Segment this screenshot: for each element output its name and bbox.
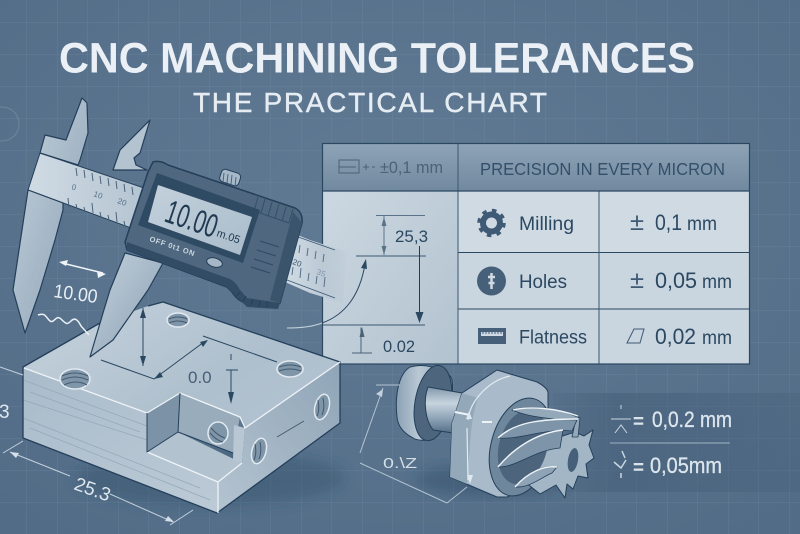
caliper beam: 20 <box>116 196 128 208</box>
table header: ±0,1 mm <box>380 158 443 177</box>
lcd screen <box>148 185 252 255</box>
block faces <box>23 302 340 513</box>
dimension drawing cell <box>322 191 458 364</box>
row: milling: ± <box>630 209 644 236</box>
upper sliding jaw <box>113 120 150 170</box>
block length dimension: 25.3 <box>71 474 113 506</box>
lower sliding jaw <box>90 253 163 357</box>
row: holes: Holes <box>519 272 567 293</box>
table header <box>322 144 750 191</box>
icon: ruler <box>478 328 506 344</box>
row: milling <box>479 209 717 236</box>
icon: flatness symbol <box>627 329 644 343</box>
digital display body: 10.00 <box>161 193 223 245</box>
row: holes: mm <box>702 272 732 293</box>
hole tolerance: = <box>633 457 644 479</box>
caliper beam: 10 <box>92 189 104 201</box>
threaded holes <box>60 313 332 465</box>
curved leader arrow <box>287 259 367 328</box>
row: holes <box>477 266 732 296</box>
thumb wheel <box>219 168 242 187</box>
caliper beam: 20 <box>291 257 303 269</box>
spiral flutes <box>512 407 580 437</box>
icon: gear <box>479 210 504 236</box>
block length dimension <box>0 367 193 525</box>
row: holes: 0,05 <box>655 268 697 293</box>
on button <box>206 256 223 269</box>
caliper beam: 35 <box>315 267 327 279</box>
table rules <box>322 143 750 364</box>
block dimensions: 0.0 <box>188 368 212 387</box>
row: holes: ± <box>630 267 644 294</box>
caliper beam: 0 <box>70 182 78 193</box>
row: flatness <box>478 324 732 349</box>
digital display body <box>125 161 302 309</box>
cutter dimension: 0.\Z <box>383 455 417 472</box>
row cells <box>458 191 750 364</box>
shank <box>425 387 462 433</box>
dimension drawing cell: 0.02 <box>383 337 415 356</box>
cutter body <box>450 370 548 497</box>
subtitle: THE PRACTICAL CHART <box>193 87 547 118</box>
note panel: secondary tolerances <box>553 393 800 492</box>
flatness tolerance <box>611 405 732 433</box>
cutter tool <box>396 362 594 503</box>
flatness tolerance: 0,0.2 mm <box>652 407 732 432</box>
measured gap callout <box>38 260 106 335</box>
row: flatness: Flatness <box>519 328 587 348</box>
row: milling: Milling <box>519 214 574 235</box>
block dimensions <box>101 308 304 437</box>
digital display body: OFF 0t1 ON <box>148 234 196 258</box>
title: CNC MACHINING TOLERANCES <box>59 34 695 82</box>
caliper beam <box>28 153 347 303</box>
cutter face ring <box>479 391 563 503</box>
panel: tolerance table <box>322 143 750 364</box>
cutter dimension <box>360 385 467 503</box>
digital display body: m.05 <box>215 227 242 247</box>
row: flatness: mm <box>702 328 732 349</box>
measured gap callout: 10.00 <box>52 281 99 308</box>
flatness tolerance: = <box>633 411 644 433</box>
row: milling: 0,1 <box>655 210 682 235</box>
row: flatness: 0,02 <box>655 324 696 349</box>
cutter teeth <box>525 430 594 498</box>
icon: hole <box>477 266 506 296</box>
hole tolerance: 0,05mm <box>650 453 722 478</box>
row: milling: mm <box>687 214 717 235</box>
table header: PRECISION IN EVERY MICRON <box>480 159 725 179</box>
machined block <box>23 302 345 513</box>
shank collar <box>396 366 453 440</box>
caliper <box>13 98 347 357</box>
hole tolerance <box>614 451 722 479</box>
cutter face bore <box>490 404 556 490</box>
fixed jaw <box>13 98 88 333</box>
dimension drawing cell: 25,3 <box>395 227 428 246</box>
